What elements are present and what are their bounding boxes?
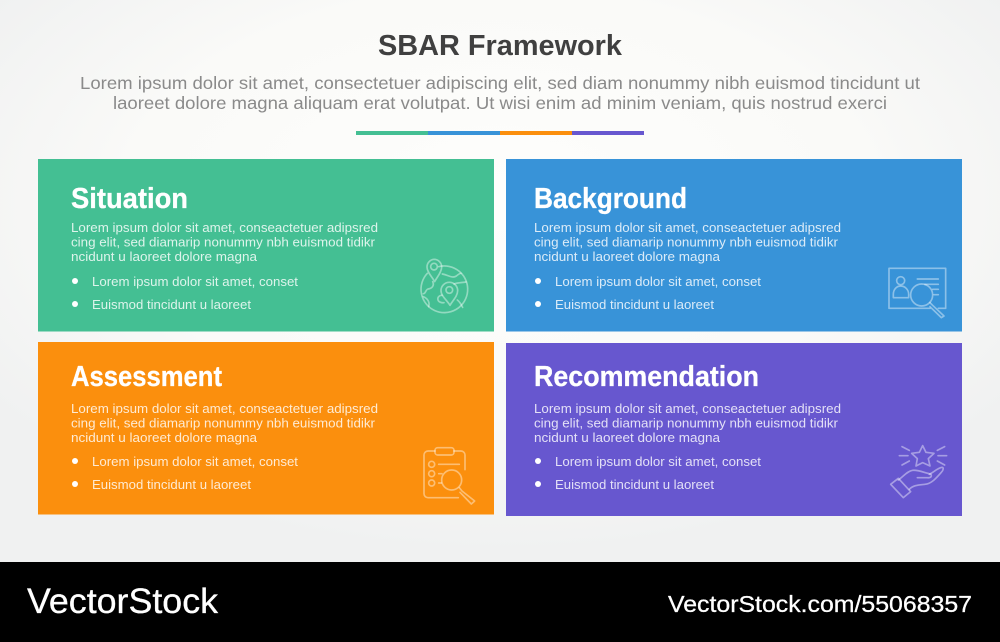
heading: situation: Situation (71, 183, 188, 215)
bullet list: situation (72, 274, 298, 312)
icon: clipboard with magnifier (424, 448, 475, 504)
bullet list: background: Lorem ipsum dolor sit amet, conset (555, 274, 761, 289)
body text: recommendation: Lorem ipsum dolor sit amet, conseactetuer adipsred (534, 401, 841, 416)
body text: assessment: Lorem ipsum dolor sit amet, conseactetuer adipsred (71, 401, 378, 416)
body text: background (534, 220, 841, 264)
subtitle text (80, 73, 920, 113)
footer url: VectorStock.com/55068357 (668, 591, 972, 617)
body text: assessment (71, 401, 378, 445)
body text: assessment: ncidunt u laoreet dolore magna (71, 430, 258, 445)
panel: background (506, 159, 962, 332)
bullet list: assessment (72, 454, 298, 492)
panel: assessment (38, 342, 494, 514)
footer logo: VectorStock (27, 582, 219, 621)
body text: background: cing elit, sed diamarip nonummy nbh euismod tidikr (534, 234, 839, 250)
body text: situation (71, 220, 378, 264)
bullet list: situation: Lorem ipsum dolor sit amet, conset (92, 274, 298, 289)
body text: background: ncidunt u laoreet dolore magna (534, 249, 721, 264)
panel: situation (38, 159, 494, 332)
title: SBAR Framework (378, 30, 623, 62)
panel: recommendation (506, 343, 962, 516)
colored divider bar (356, 131, 644, 135)
bullet list: recommendation: Lorem ipsum dolor sit amet, conset (555, 454, 761, 469)
subtitle text: laoreet dolore magna aliquam erat volutpat. Ut wisi enim ad minim veniam, quis nostrud exerci (113, 93, 887, 113)
heading: recommendation: Recommendation (534, 361, 759, 393)
icon: profile card with magnifier (889, 268, 946, 318)
bullet list: recommendation: Euismod tincidunt u laoreet (555, 477, 714, 492)
bullet list: assessment: Euismod tincidunt u laoreet (92, 477, 251, 492)
heading: background: Background (534, 183, 687, 215)
icon: globe with map pins (421, 259, 468, 313)
bullet list: assessment: Lorem ipsum dolor sit amet, conset (92, 454, 298, 469)
icon: hand holding star (891, 446, 947, 498)
body text: background: Lorem ipsum dolor sit amet, conseactetuer adipsred (534, 220, 841, 235)
bullet list: situation: Euismod tincidunt u laoreet (92, 297, 251, 312)
body text: recommendation: ncidunt u laoreet dolore magna (534, 430, 721, 445)
bullet list: recommendation (535, 454, 761, 492)
body text: assessment: cing elit, sed diamarip nonummy nbh euismod tidikr (71, 416, 376, 430)
body text: situation: ncidunt u laoreet dolore magna (71, 249, 258, 264)
bullet list: background (535, 274, 761, 312)
subtitle text: Lorem ipsum dolor sit amet, consectetuer adipiscing elit, sed diam nonummy nibh euismod tincidunt ut (80, 73, 920, 93)
body text: situation: cing elit, sed diamarip nonummy nbh euismod tidikr (71, 234, 376, 250)
bullet list: background: Euismod tincidunt u laoreet (555, 297, 714, 312)
footer bar (0, 562, 1000, 642)
body text: recommendation (534, 401, 841, 445)
body text: recommendation: cing elit, sed diamarip nonummy nbh euismod tidikr (534, 416, 839, 430)
body text: situation: Lorem ipsum dolor sit amet, conseactetuer adipsred (71, 220, 378, 235)
heading: assessment: Assessment (71, 361, 222, 393)
